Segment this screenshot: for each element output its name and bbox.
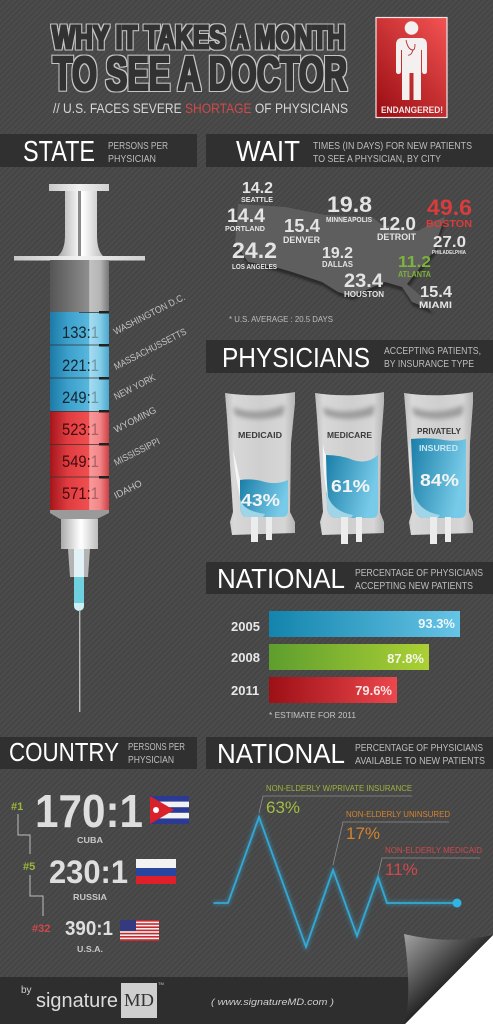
panel: country header: COUNTRY	[9, 737, 119, 767]
rank connectors	[18, 814, 43, 916]
flag: russia	[136, 859, 176, 884]
callout: private insurance: 63%	[266, 798, 300, 817]
panel: national accepting header: ACCEPTING NEW PATIENTS	[355, 580, 473, 592]
city wait times: MIAMI	[419, 300, 452, 310]
usa row	[32, 918, 159, 954]
usa row: #32	[32, 923, 50, 935]
syringe ratios: 523:1	[62, 421, 99, 439]
syringe plunger	[14, 184, 145, 260]
bar 2005: 2005	[231, 619, 260, 634]
syringe needle	[61, 519, 98, 712]
logo: signature md	[21, 981, 164, 1018]
chart: iv bag medicare: MEDICARE	[327, 430, 372, 440]
state labels: WYOMING	[112, 405, 158, 436]
chart: iv bag privately insured: PRIVATELY	[417, 426, 461, 436]
panel: state header	[0, 134, 197, 168]
city wait times: PORTLAND	[225, 224, 266, 233]
bar 2008: 87.8%	[387, 651, 424, 666]
flag: cuba	[150, 796, 189, 824]
city wait times: DENVER	[283, 235, 320, 245]
city wait times: 14.2	[242, 180, 273, 197]
callout: uninsured: NON-ELDERLY UNINSURED	[346, 810, 450, 819]
bar 2011: 2011	[231, 683, 259, 698]
chart: country ranking	[11, 785, 189, 954]
logo: signature md: TM	[158, 981, 164, 986]
panel: physicians header: PHYSICIANS	[222, 342, 370, 373]
panel: wait header: TO SEE A PHYSICIAN, BY CITY	[313, 153, 441, 165]
city wait times: 14.4	[227, 206, 265, 227]
callout: medicaid	[378, 846, 482, 879]
panel: national available header	[206, 737, 493, 769]
panel: country header: PHYSICIAN	[128, 754, 174, 766]
chart: iv bag medicare	[315, 392, 384, 544]
panel: syringe chart	[14, 184, 189, 712]
city wait times: 15.4	[284, 216, 320, 236]
syringe barrel	[50, 260, 109, 519]
syringe ratios: 571:1	[62, 485, 99, 503]
syringe ratios: 249:1	[62, 389, 99, 407]
panel: national available header: NATIONAL	[217, 738, 345, 769]
us map silhouette	[235, 204, 446, 314]
chart: iv bag medicaid	[225, 392, 295, 542]
bar 2008: 2008	[231, 650, 260, 665]
footer	[0, 977, 493, 1024]
syringe ratios	[62, 324, 99, 503]
chart: iv bag medicaid: MEDICAID	[238, 430, 282, 440]
cuba row: #1	[11, 801, 23, 813]
callout: private insurance: NON-ELDERLY W/PRIVATE INSURANCE	[266, 784, 413, 793]
page curl	[404, 934, 493, 1024]
panel: physicians header	[206, 340, 493, 373]
logo: signature md: by	[21, 985, 32, 996]
title: TO SEE A DOCTOR	[53, 48, 347, 101]
city wait times: PHILADELPHIA	[432, 250, 466, 256]
city wait times: 12.0	[379, 214, 416, 234]
panel: country header	[0, 737, 197, 769]
estimate note: * ESTIMATE FOR 2011	[269, 710, 356, 720]
bar 2011	[231, 677, 397, 703]
city wait times: LOS ANGELES	[232, 262, 277, 271]
callout: medicaid: NON-ELDERLY MEDICAID	[385, 846, 482, 855]
city wait times: ATLANTA	[398, 269, 431, 279]
city wait times: 23.4	[344, 271, 383, 292]
bar chart: physicians accepting new patients	[231, 611, 460, 720]
bar 2011: 79.6%	[355, 683, 392, 698]
callout: private insurance	[259, 784, 413, 817]
callout: uninsured	[333, 810, 450, 865]
chart: iv bag privately insured: 84%	[420, 470, 459, 490]
callout: uninsured: 17%	[346, 824, 380, 843]
cuba row	[11, 785, 189, 845]
city wait times: 27.0	[433, 234, 466, 251]
logo: signature md: signature	[36, 990, 118, 1012]
state labels: MISSISSIPPI	[112, 436, 162, 469]
syringe ratios: 549:1	[62, 453, 99, 471]
syringe ratios: 133:1	[62, 324, 99, 342]
city wait times: SEATTLE	[241, 195, 273, 204]
city wait times: 24.2	[232, 238, 277, 263]
u.s. average note: * U.S. AVERAGE : 20.5 DAYS	[229, 314, 333, 324]
panel: state header: STATE	[23, 136, 95, 168]
panel: national accepting header	[206, 562, 493, 594]
russia row: RUSSIA	[73, 892, 107, 902]
website url: ( www.signatureMD.com )	[211, 997, 334, 1008]
panel: state header: PHYSICIAN	[108, 153, 156, 165]
cuba row: 170:1	[35, 785, 143, 837]
city wait times: 11.2	[398, 254, 431, 271]
flag: usa	[120, 920, 159, 941]
chart: wait map	[225, 180, 472, 324]
callout: medicaid: 11%	[385, 860, 418, 879]
panel: wait header	[206, 134, 493, 168]
city wait times: DETROIT	[377, 232, 416, 242]
state labels: IDAHO	[112, 478, 144, 502]
state labels: NEW YORK	[112, 372, 158, 403]
bar 2005: 93.3%	[418, 616, 455, 631]
usa row: 390:1	[65, 918, 113, 940]
panel: physicians header: BY INSURANCE TYPE	[384, 358, 474, 370]
russia row	[23, 854, 176, 902]
chart: heartbeat line	[214, 817, 462, 947]
chart: iv bag medicaid: 43%	[241, 490, 280, 510]
panel: national accepting header: NATIONAL	[217, 563, 345, 594]
state labels: WASHINGTON D.C.	[112, 292, 187, 338]
state labels	[112, 292, 189, 502]
cuba row: CUBA	[77, 835, 103, 845]
chart: iv bag privately insured	[404, 392, 473, 544]
icon: endangered doctor badge: ENDANGERED!	[381, 105, 443, 115]
city wait times: BOSTON	[426, 219, 472, 230]
bar 2008	[231, 644, 429, 670]
icon: endangered doctor badge	[376, 18, 447, 118]
logo: signature md: MD	[124, 990, 154, 1010]
russia row: #5	[23, 861, 35, 873]
usa row: U.S.A.	[77, 944, 103, 954]
city wait times: 49.6	[427, 195, 472, 220]
bar 2005	[231, 611, 460, 637]
russia row: 230:1	[49, 854, 128, 890]
title	[52, 18, 347, 101]
state labels: MASSACHUSSETTS	[112, 327, 189, 373]
panel: wait header: WAIT	[236, 136, 300, 168]
city wait times	[225, 180, 472, 310]
chart: iv bag privately insured: INSURED	[419, 443, 458, 453]
title: WHY IT TAKES A MONTH	[52, 18, 345, 56]
panel: state header: PERSONS PER	[108, 140, 168, 152]
city wait times: 19.8	[327, 192, 372, 217]
city wait times: 19.2	[322, 245, 353, 262]
panel: country header: PERSONS PER	[128, 741, 185, 753]
city wait times: MINNEAPOLIS	[326, 217, 372, 224]
city wait times: HOUSTON	[344, 289, 384, 299]
syringe ratios: 221:1	[62, 357, 99, 375]
chart: iv bag medicare: 61%	[331, 476, 370, 496]
city wait times: 15.4	[420, 284, 452, 301]
city wait times: DALLAS	[322, 259, 353, 269]
subtitle: // U.S. FACES SEVERE SHORTAGE OF PHYSICIANS	[53, 100, 348, 116]
